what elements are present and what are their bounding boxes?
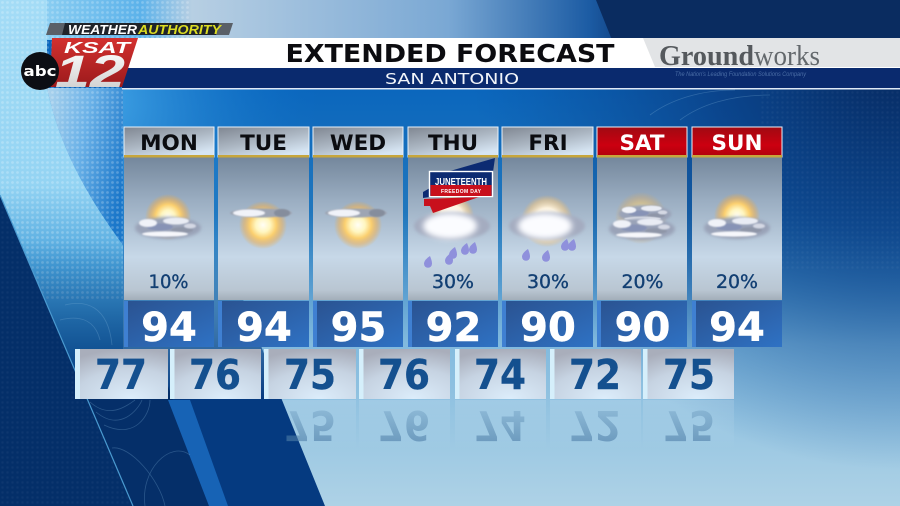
sponsor logo [659,40,820,78]
icon: cloudy [609,192,675,244]
Juneteenth banner: FREEDOM DAY [441,189,482,195]
column: WED: WED [330,131,386,156]
low temperature row: 76 [378,351,430,399]
low temperature row: 72 [569,351,621,399]
icon: sunny with thin cloud [325,201,387,249]
precipitation chance: 20% [622,272,664,293]
Juneteenth banner: JUNETEENTH [435,176,487,188]
column: FRI: FRI [528,131,568,156]
icon: rain cloud with sun [509,195,585,262]
column: WED: 95 [331,305,386,351]
column: MON: MON [140,131,198,156]
low temperature row: 76 [189,351,241,399]
column: WED [313,127,403,351]
column: FRI [502,127,593,351]
column: THU: 92 [426,305,481,351]
low temperature reflection: 75 [284,401,336,449]
Juneteenth banner [423,158,495,213]
sponsor logo: works [754,40,820,72]
column: THU [408,127,498,351]
weather authority strip: WEATHER [68,22,138,37]
sponsor logo: Ground [659,40,754,72]
subtitle: SAN ANTONIO [385,70,519,88]
low temperature row: 75 [663,351,715,399]
low temperature row: 77 [95,351,147,399]
icon: rain cloud [414,194,490,268]
column: THU: THU [428,131,478,156]
column: FRI: 90 [520,305,576,351]
precipitation chance: 10% [148,272,188,293]
weather authority strip: AUTHORITY [137,22,222,37]
low temperature reflection: 72 [569,401,621,449]
precipitation chance: 30% [527,272,569,293]
abc circle: abc [24,64,56,80]
low temperature row: 74 [474,351,526,399]
low temperature reflection: 75 [663,401,715,449]
column: TUE: 94 [236,305,292,351]
column: SAT [597,127,687,351]
low temperature row [75,349,734,399]
title: EXTENDED FORECAST [286,39,614,68]
weather authority strip [46,22,233,37]
precipitation chance: 20% [716,272,758,293]
column: TUE [218,127,309,351]
low temperature reflection [282,400,734,450]
station logo: 12 [55,46,125,97]
column: MON: 94 [141,305,197,351]
column: SUN: 94 [709,305,765,351]
station logo [21,38,138,97]
column: SUN [692,127,782,351]
low temperature reflection: 74 [474,401,526,449]
column: MON [124,127,214,351]
precipitation chance: 30% [432,272,474,293]
column: TUE: TUE [240,131,287,156]
icon: sunny with thin cloud [230,201,292,249]
icon: mostly cloudy with sun [704,193,770,239]
header bar [122,38,900,90]
low temperature row: 75 [284,351,336,399]
sponsor logo: The Nation's Leading Foundation Solutions Company [675,71,807,78]
column: SUN: SUN [712,131,762,156]
icon: mostly cloudy with sun [135,194,201,240]
column: SAT: SAT [619,131,665,156]
station logo: KSAT [64,40,132,57]
low temperature reflection: 76 [378,401,430,449]
column: SAT: 90 [615,305,670,351]
